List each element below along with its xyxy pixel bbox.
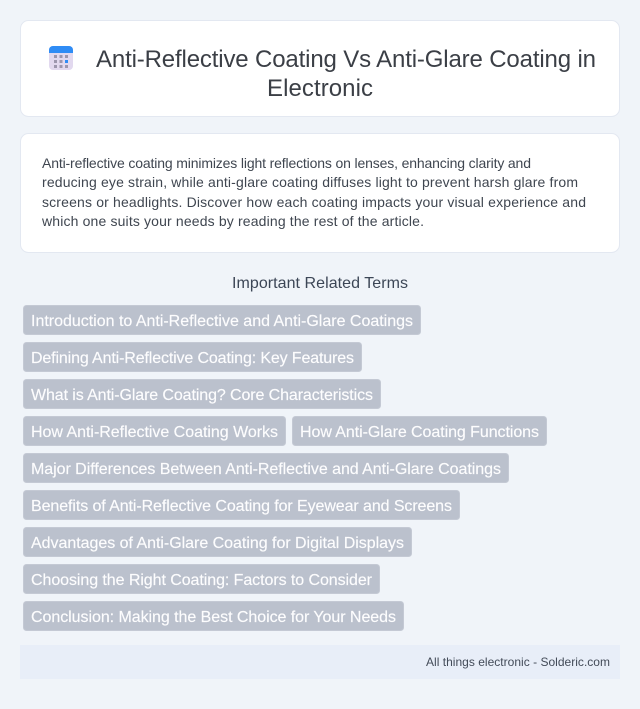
tag: how anti-reflective works	[24, 416, 286, 446]
tag: defining	[24, 342, 362, 372]
tag: advantages	[24, 528, 412, 556]
tag: how anti-reflective works: How Anti-Reflective Coating Works	[31, 424, 278, 441]
panel: intro text: Anti-reflective coating minimizes light reflections on lenses, enhancing clarity and	[42, 155, 531, 171]
tag: major differences	[24, 454, 508, 482]
tag: advantages: Advantages of Anti-Glare Coating for Digital Displays	[31, 535, 404, 552]
panel: intro text: screens or headlights. Discover how each coating impacts your visual experience and	[42, 194, 586, 210]
title: Anti-Reflective Coating Vs Anti-Glare Coating in	[96, 46, 596, 73]
tag: defining: Defining Anti-Reflective Coating: Key Features	[31, 350, 354, 367]
tag: introduction	[24, 306, 420, 334]
footer bar	[20, 645, 620, 679]
tag: choosing	[24, 564, 380, 594]
tag: conclusion: Conclusion: Making the Best Choice for Your Needs	[31, 609, 396, 626]
title	[96, 46, 596, 102]
panel: intro text	[20, 134, 620, 252]
panel: title header	[20, 20, 620, 116]
tag: how anti-glare functions	[292, 416, 546, 446]
panel: intro text: which one suits your needs by reading the rest of the article.	[41, 213, 424, 229]
tag: major differences: Major Differences Between Anti-Reflective and Anti-Glare Coatings	[31, 461, 501, 478]
tag: benefits	[24, 490, 460, 520]
footer bar: All things electronic - Solderic.com	[426, 655, 610, 669]
tag: benefits: Benefits of Anti-Reflective Coating for Eyewear and Screens	[31, 498, 452, 515]
tag: what is anti-glare: What is Anti-Glare Coating? Core Characteristics	[31, 387, 373, 404]
tag: how anti-glare functions: How Anti-Glare Coating Functions	[300, 424, 539, 441]
tag: introduction: Introduction to Anti-Reflective and Anti-Glare Coatings	[31, 313, 413, 330]
tag: what is anti-glare	[24, 380, 380, 408]
heading: important related terms: Important Related Terms	[232, 275, 408, 292]
title: Electronic	[267, 75, 373, 102]
panel: intro text: reducing eye strain, while anti-glare coating diffuses light to prevent harsh glare from	[42, 174, 578, 190]
tag: conclusion	[24, 602, 404, 630]
tag: choosing: Choosing the Right Coating: Factors to Consider	[31, 572, 373, 589]
icon: calendar	[49, 46, 73, 70]
